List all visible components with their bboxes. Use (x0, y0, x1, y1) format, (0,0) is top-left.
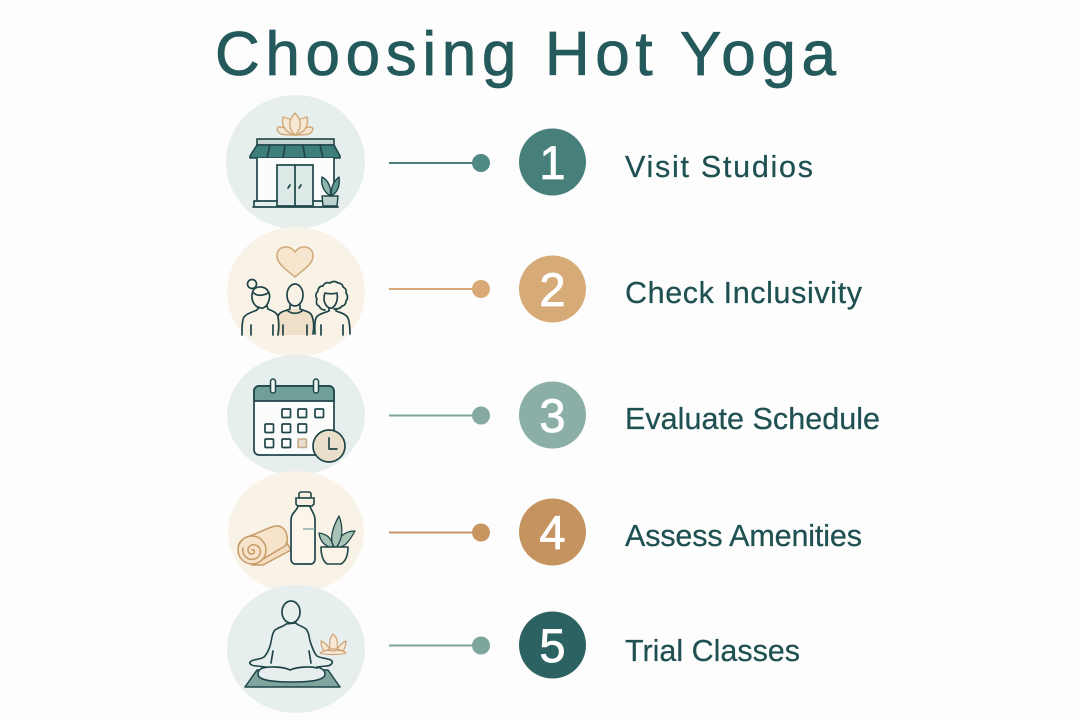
label: step 2: Check Inclusivity (625, 276, 863, 310)
title: Choosing Hot Yoga (215, 20, 837, 89)
number badge 3 (519, 382, 586, 448)
label: step 3: Evaluate Schedule (625, 402, 880, 436)
number badge 1 (519, 128, 586, 196)
number badge 2: 2 (539, 263, 566, 316)
number badge 5 (519, 612, 586, 678)
number badge 4 (519, 498, 586, 566)
connector 3 (389, 406, 490, 424)
number badge 4: 4 (539, 506, 566, 559)
label: step 1: Visit Studios (625, 150, 813, 184)
connector 4 (389, 524, 490, 542)
connector 5 (389, 636, 490, 654)
number badge 1: 1 (539, 136, 566, 189)
step 4 icon: towel roll, water bottle and plant (228, 471, 364, 593)
step 1 icon: yoga studio storefront (226, 95, 365, 229)
connector 2 (389, 280, 490, 298)
number badge 2 (519, 256, 586, 322)
label: step 5: Trial Classes (625, 634, 800, 668)
label: step 4: Assess Amenities (625, 519, 862, 553)
step 5 icon: meditating figure on mat (227, 585, 365, 713)
number badge 3: 3 (539, 389, 566, 442)
number badge 5: 5 (539, 619, 566, 672)
step 2 icon: inclusive group with heart (227, 227, 365, 357)
connector 1 (389, 154, 490, 172)
step 3 icon: calendar and clock (227, 355, 365, 475)
